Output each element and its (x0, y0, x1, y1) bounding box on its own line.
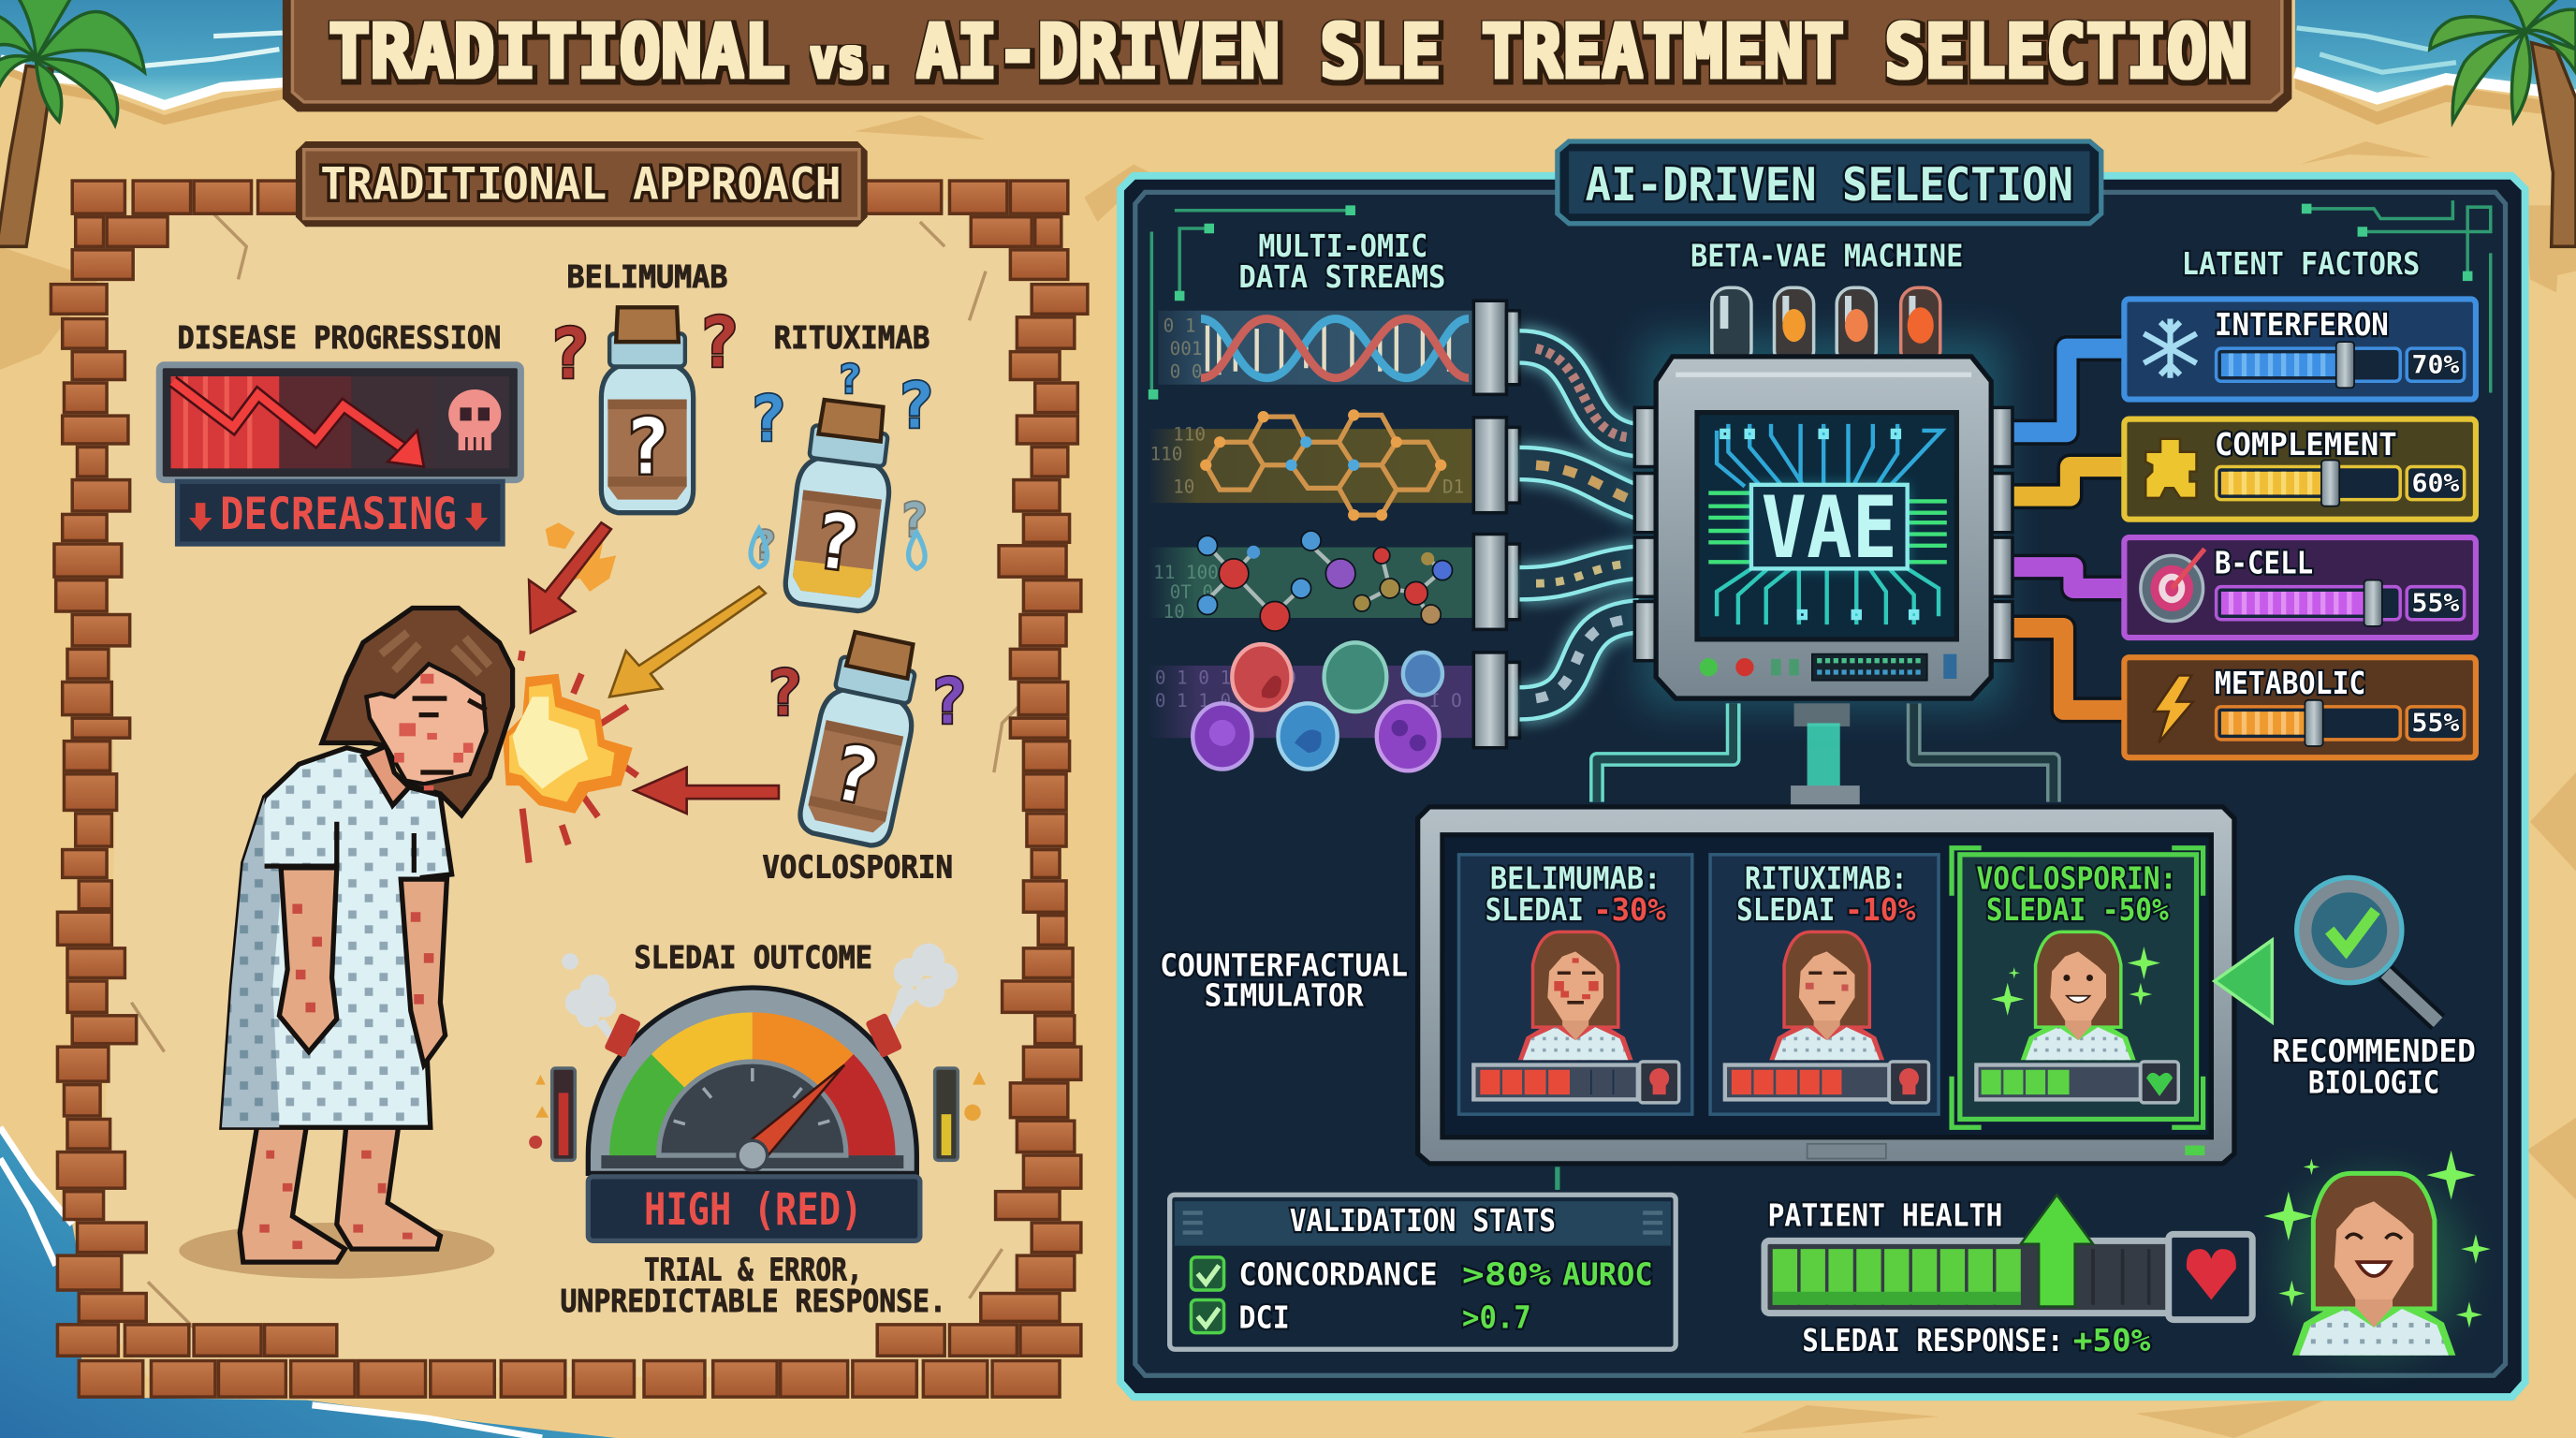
card: complement (2124, 419, 2476, 520)
icon: blue question marks: ? (900, 492, 928, 547)
label: recommended biologic (2272, 1033, 2476, 1100)
card: metabolic: 55% (2411, 710, 2460, 738)
icon: side meters (529, 1068, 986, 1160)
card: rituximab simulation (1710, 855, 1939, 1114)
side ports (1634, 407, 2012, 661)
sea bottom left (0, 1127, 616, 1438)
caption: trial and error: TRIAL & ERROR, (644, 1251, 862, 1287)
stream: metabolomics hexagons: 110 (1173, 423, 1206, 445)
status: decreasing: DECREASING (220, 489, 457, 540)
card: interferon (2124, 299, 2476, 400)
chart: disease progression (159, 365, 520, 480)
panel: patient health (1764, 1151, 2491, 1358)
icon: red question marks: ? (549, 315, 591, 395)
row: DCI (1191, 1299, 1531, 1335)
title text: traditional: TRADITIONAL (329, 8, 785, 95)
card: voclosporin simulation (recommended) (1952, 848, 2203, 1127)
portrait: unwell (1769, 932, 1884, 1060)
row: concordance: >80% (1462, 1256, 1551, 1293)
panel: patient health: PATIENT HEALTH (1767, 1197, 2002, 1234)
card: rituximab simulation: RITUXIMAB: (1745, 860, 1908, 897)
stream: proteomics molecules: 11 100 (1153, 562, 1219, 583)
icon: water droplets (751, 529, 925, 568)
arrow: recommendation (2215, 940, 2272, 1022)
icon: blue question marks: ? (897, 369, 934, 442)
label: SLEDAI outcome: SLEDAI OUTCOME (634, 939, 872, 976)
icon: blue question marks: ? (838, 357, 861, 403)
title text: vs: vs. (810, 27, 892, 91)
card: B-cell: B-CELL (2215, 545, 2313, 581)
icon: skull (448, 389, 501, 450)
icon: voclosporin vial (797, 629, 929, 849)
icon: question marks voclosporin: ? (929, 665, 968, 738)
card: B-cell: 55% (2411, 590, 2460, 618)
card: voclosporin simulation (recommended): VOCLOSPORIN: (1976, 860, 2177, 897)
health bar (1976, 1062, 2178, 1103)
sea top right (2295, 0, 2576, 125)
machine glow (1643, 337, 2004, 707)
icon: voclosporin vial: ? (824, 728, 886, 824)
label: multi-omic data streams (1238, 227, 1445, 295)
card: complement: 60% (2411, 470, 2460, 498)
label: disease progression: DISEASE PROGRESSION (178, 319, 501, 356)
hair (322, 609, 513, 815)
row: concordance: AUROC (1562, 1256, 1653, 1293)
brick wall frame (51, 181, 1088, 1397)
icon: snowflake (2144, 319, 2197, 378)
health bar (1764, 1240, 2175, 1313)
row: DCI: DCI (1238, 1299, 1290, 1335)
sleeve seams (265, 822, 414, 873)
panel: validation stats (1170, 1195, 1676, 1349)
status: decreasing (178, 481, 503, 544)
icon: red question marks: ? (698, 303, 739, 383)
icon: steam clouds (562, 944, 958, 1042)
card: interferon: INTERFERON (2215, 306, 2389, 343)
stream: metabolomics hexagons (1149, 409, 1472, 521)
status: high (red) (588, 1177, 920, 1240)
stream: proteomics molecules: 0T 0 (1170, 581, 1213, 603)
icon: question marks voclosporin: ? (766, 657, 803, 730)
icon: belimumab vial (601, 307, 694, 513)
card: metabolic (2124, 657, 2476, 757)
health bar (1725, 1062, 1928, 1103)
card: interferon: 70% (2411, 351, 2460, 379)
icon: magnifier with check (2297, 877, 2438, 1022)
sea top left (0, 0, 287, 125)
left arm (279, 868, 337, 1051)
stream: genomics DNA: 001 (1170, 338, 1202, 360)
card: belimumab simulation (1459, 855, 1692, 1114)
label: SLEDAI response: +50% (2073, 1322, 2150, 1358)
icon: heart (2169, 1234, 2252, 1320)
monitor: simulator (1418, 807, 2234, 1164)
arrow: improvement (2021, 1195, 2093, 1307)
icon: belimumab vial: ? (624, 404, 670, 492)
sparkles (1991, 946, 2160, 1016)
label: counterfactual simulator (1160, 947, 1408, 1013)
parchment (98, 200, 1051, 1377)
sparkles (2264, 1151, 2491, 1328)
shadow (179, 1223, 494, 1279)
screen (1697, 413, 1956, 639)
label: latent factors: LATENT FACTORS (2182, 245, 2420, 282)
caption: trial and error: UNPREDICTABLE RESPONSE. (560, 1283, 946, 1319)
stream: genomics DNA: 0 0 (1170, 361, 1202, 383)
stream: cells (1149, 642, 1472, 770)
label: recommended biologic: BIOLOGIC (2308, 1064, 2439, 1100)
card: metabolic: METABOLIC (2215, 665, 2365, 701)
stream: genomics DNA: 0 1 (1164, 315, 1195, 337)
status lights (1700, 654, 1956, 681)
caption: trial and error (560, 1251, 946, 1319)
health bar (1473, 1062, 1679, 1103)
panel: validation stats: VALIDATION STATS (1290, 1202, 1556, 1239)
stream: metabolomics hexagons: 110 (1150, 444, 1182, 465)
status: high (red): HIGH (RED) (644, 1184, 862, 1236)
card: rituximab simulation: -10% (1845, 891, 1915, 928)
icon: blue question marks (749, 357, 934, 568)
stream: cells: 0 1 1 0 1 (1155, 690, 1252, 712)
VAE chip: VAE (1761, 477, 1897, 578)
chart: SLEDAI gauge (588, 988, 916, 1173)
parchment cracks (131, 213, 1035, 1331)
icon: blue question marks: ? (753, 522, 776, 568)
connectors: stream ports (1473, 301, 1519, 748)
label: counterfactual simulator: SIMULATOR (1204, 976, 1365, 1013)
row: DCI: >0.7 (1462, 1299, 1531, 1335)
label: multi-omic data streams: DATA STREAMS (1238, 258, 1445, 295)
label: voclosporin: VOCLOSPORIN (762, 848, 953, 885)
pipes to simulator (1597, 703, 2054, 805)
label: beta-vae machine: BETA-VAE MACHINE (1690, 237, 1963, 273)
figure: patient with rash (179, 609, 513, 1279)
stream: proteomics molecules (1149, 531, 1472, 631)
card: belimumab simulation: -30% (1593, 891, 1666, 928)
heading: traditional approach: TRADITIONAL APPROACH (320, 158, 842, 210)
label: rituximab: RITUXIMAB (774, 319, 929, 356)
gown shading (222, 797, 283, 1127)
label: belimumab: BELIMUMAB (567, 258, 728, 295)
palm tree right (2430, 0, 2576, 246)
label: recommended biologic: RECOMMENDED (2272, 1033, 2476, 1069)
icon: rituximab vial: ? (809, 496, 865, 590)
portrait: sick (1518, 932, 1633, 1060)
heading: AI-driven selection: AI-DRIVEN SELECTION (1586, 157, 2073, 212)
icon: explosion (503, 651, 637, 863)
card: belimumab simulation: SLEDAI (1486, 891, 1584, 928)
card: B-cell (2124, 537, 2476, 638)
card: voclosporin simulation (recommended): SLEDAI -50% (1986, 891, 2169, 928)
right arm (401, 879, 446, 1065)
pipes to latent factors (2014, 348, 2126, 710)
circuits (1708, 424, 1947, 624)
machine: beta-VAE (1634, 287, 2012, 707)
label: counterfactual simulator: COUNTERFACTUAL (1160, 947, 1408, 984)
palm tree left (0, 0, 144, 246)
heading: AI-driven selection (1558, 141, 2101, 224)
icon: rituximab vial (783, 398, 900, 613)
portrait: healthy (2021, 932, 2136, 1060)
stream: metabolomics hexagons: D1 (1442, 477, 1464, 498)
stream: cells: I O (1429, 690, 1462, 712)
vacuum tubes (1705, 287, 1947, 376)
face (366, 664, 487, 784)
data tubes into machine (1519, 346, 1640, 703)
icon: question marks voclosporin (766, 657, 968, 738)
icon: target (2141, 549, 2204, 622)
row: concordance: CONCORDANCE (1238, 1256, 1438, 1293)
legs (240, 1121, 345, 1262)
arrow: rituximab to patient (609, 587, 766, 697)
icon: blue question marks: ? (749, 382, 786, 455)
hair highlights (381, 633, 490, 674)
neck (363, 746, 409, 805)
label: multi-omic data streams: MULTI-OMIC (1258, 227, 1427, 264)
console frame (1120, 176, 2525, 1397)
gown (222, 748, 452, 1127)
panel: traditional approach (51, 141, 1088, 1397)
VAE box (1751, 485, 1908, 568)
stream: metabolomics hexagons: 10 (1173, 477, 1194, 498)
closed eyes and mouth (413, 698, 487, 772)
arrow: belimumab to patient (529, 522, 616, 633)
stream: cells: 0 1 0 1 0 0 0 (1155, 667, 1296, 688)
label: SLEDAI response: SLEDAI RESPONSE: (1802, 1322, 2063, 1358)
title text: AI-driven: AI-DRIVEN SLE TREATMENT SELECTION (916, 8, 2247, 95)
title banner (283, 0, 2291, 111)
heading: traditional approach (296, 141, 868, 227)
icon: red question marks (549, 303, 739, 395)
row: concordance (1191, 1256, 1653, 1293)
card: rituximab simulation: SLEDAI (1736, 891, 1835, 928)
icon: lightning bolt (2154, 675, 2193, 742)
card: belimumab simulation: BELIMUMAB: (1490, 860, 1661, 897)
chassis (1656, 357, 1991, 698)
figure: happy patient (2264, 1151, 2491, 1356)
connector to validation (1556, 1167, 1559, 1190)
card: complement: COMPLEMENT (2215, 426, 2397, 462)
arrow: voclosporin to patient (634, 768, 779, 814)
stream: proteomics molecules: 10 (1164, 601, 1185, 623)
icon: puzzle piece (2145, 439, 2197, 498)
stream: genomics DNA (1158, 311, 1473, 385)
panel: AI-driven selection (1120, 141, 2525, 1397)
